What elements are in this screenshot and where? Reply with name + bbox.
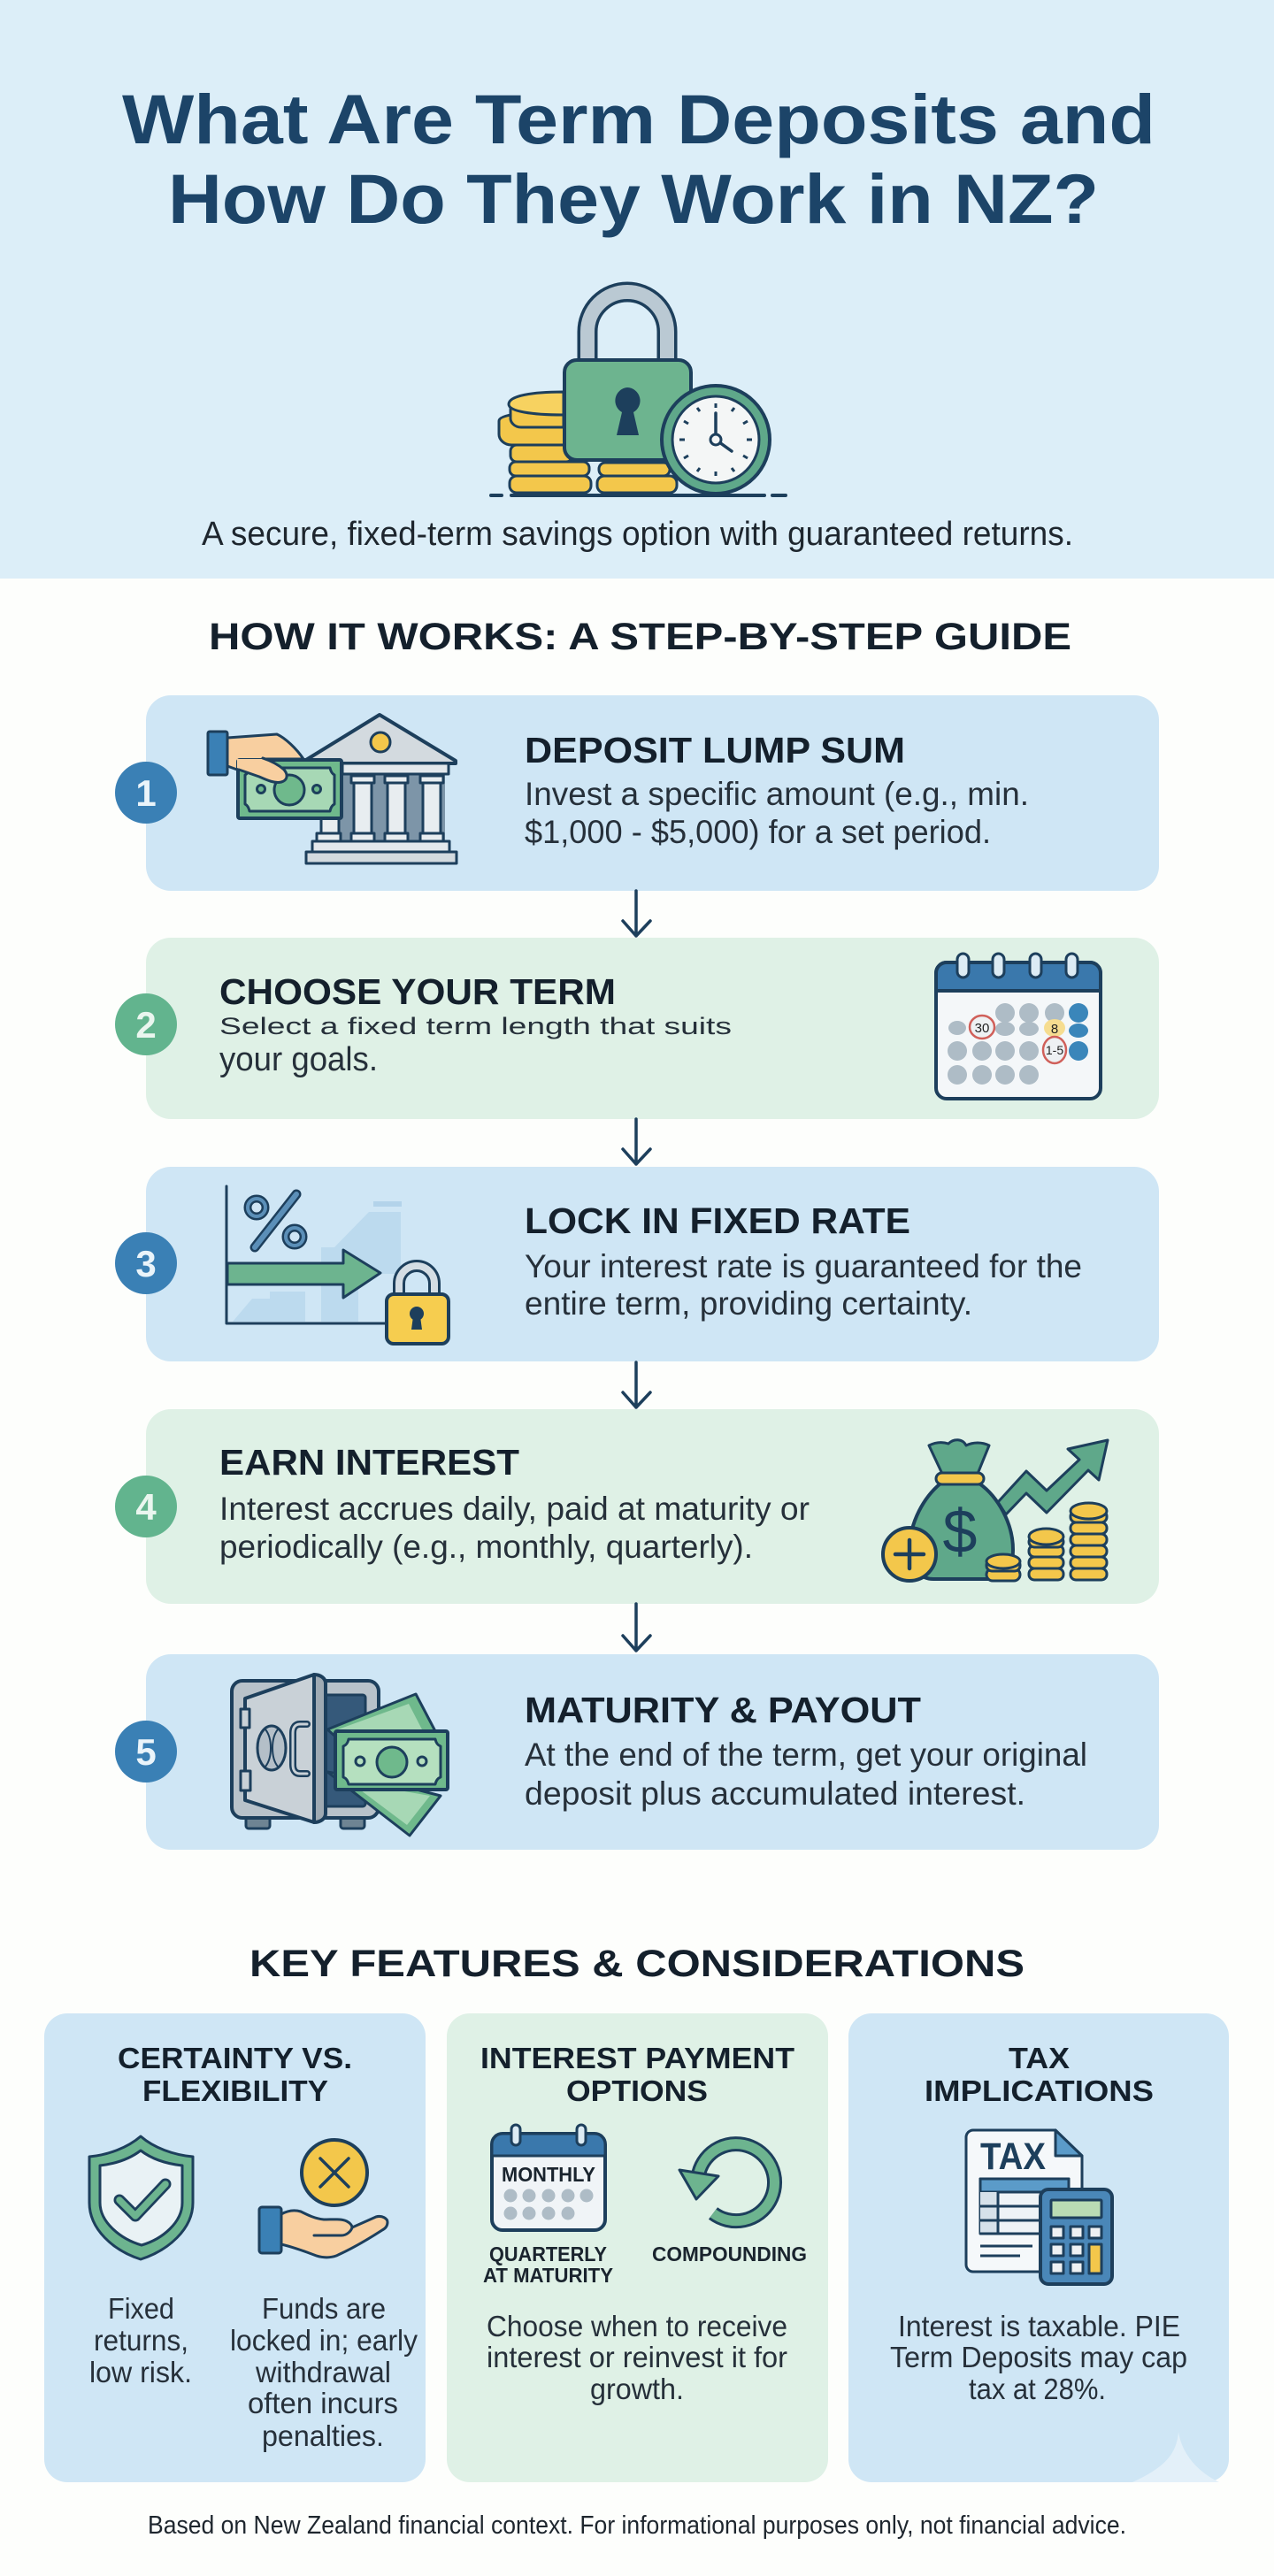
title: How Do They Work in NZ? (168, 159, 1099, 238)
icon: shield with check (89, 2136, 193, 2259)
panel heading: TAX (1009, 2042, 1070, 2074)
text: funds locked in: Funds are (262, 2292, 386, 2325)
step number 4: 4 (135, 1486, 157, 1528)
text: tax note: Interest is taxable. PIE (898, 2310, 1180, 2342)
panel heading: CERTAINTY VS. (118, 2042, 352, 2074)
header panel (0, 0, 1274, 579)
panel: interest payment options (447, 2013, 828, 2482)
panel: certainty vs flexibility (44, 2013, 426, 2482)
text: fixed returns: Fixed (108, 2292, 174, 2325)
icon: hand with penalty coin (259, 2140, 388, 2258)
text: choose when to receive: Choose when to receive (487, 2310, 787, 2342)
step description (525, 1248, 1082, 1322)
icon: monthly calendar (492, 2125, 605, 2230)
step description: entire term, providing certainty. (525, 1285, 972, 1322)
text: funds locked in: penalties. (262, 2419, 384, 2452)
icon: padlock, coins and clock (491, 292, 786, 495)
step description: Your interest rate is guaranteed for the (525, 1248, 1082, 1284)
step number 3 (115, 1232, 177, 1294)
step title: DEPOSIT LUMP SUM (525, 730, 905, 770)
icon: calendar (936, 954, 1101, 1099)
panel heading (118, 2042, 352, 2107)
step number 3: 3 (135, 1243, 157, 1284)
step description: Invest a specific amount (e.g., min. (525, 776, 1029, 812)
subtitle: A secure, fixed-term savings option with guaranteed returns. (202, 516, 1073, 553)
arrow (623, 1604, 650, 1651)
text: fixed returns (89, 2292, 192, 2388)
icon: calendar: 1-5 (1046, 1043, 1063, 1057)
panel heading: INTEREST PAYMENT (480, 2042, 794, 2074)
icon: tax form and calculator (966, 2130, 1112, 2284)
icon: monthly calendar: MONTHLY (502, 2163, 595, 2186)
text: funds locked in (230, 2292, 418, 2452)
text: funds locked in: withdrawal (255, 2356, 391, 2388)
label: quarterly, at maturity (483, 2242, 613, 2287)
step description: deposit plus accumulated interest. (525, 1775, 1025, 1812)
text: funds locked in: often incurs (248, 2387, 398, 2419)
panel: step 3 lock in fixed rate (115, 1167, 1159, 1361)
step number 4 (115, 1476, 177, 1537)
icon: money bag, growth arrow and coins (883, 1440, 1108, 1581)
icon: money bag, growth arrow and coins: $ (943, 1497, 977, 1566)
text: tax note (890, 2310, 1187, 2405)
label: quarterly, at maturity: QUARTERLY (489, 2242, 607, 2266)
step number 1: 1 (135, 772, 157, 814)
icon: compounding cycle arrow (679, 2144, 775, 2221)
panel: step 4 earn interest (115, 1409, 1159, 1604)
label: compounding: COMPOUNDING (652, 2242, 807, 2266)
step title: MATURITY & PAYOUT (525, 1690, 921, 1730)
panel: tax implications (848, 2013, 1229, 2482)
step description: Select a fixed term length that suits (219, 1013, 732, 1039)
step description: $1,000 - $5,000) for a set period. (525, 814, 991, 850)
step description (525, 776, 1029, 850)
footer disclaimer: Based on New Zealand financial context. For informational purposes only, not financial advice. (148, 2511, 1126, 2540)
step number 5: 5 (135, 1731, 157, 1773)
title: What Are Term Deposits and (122, 80, 1155, 158)
panel heading: IMPLICATIONS (925, 2074, 1154, 2107)
text: tax note: tax at 28%. (969, 2373, 1106, 2405)
text: choose when to receive (487, 2310, 787, 2405)
step title: EARN INTEREST (219, 1442, 519, 1483)
step description: Interest accrues daily, paid at maturity or (219, 1491, 810, 1527)
step title: CHOOSE YOUR TERM (219, 971, 616, 1012)
step description: your goals. (219, 1041, 378, 1078)
step description: periodically (e.g., monthly, quarterly). (219, 1529, 753, 1565)
icon: open safe with cash (232, 1675, 448, 1836)
step description (219, 1013, 732, 1078)
text: funds locked in: locked in; early (230, 2324, 418, 2357)
heading: how it works: HOW IT WORKS: A STEP-BY-STEP GUIDE (209, 616, 1071, 658)
icon: tax form and calculator: TAX (980, 2135, 1046, 2178)
arrow (623, 1362, 650, 1407)
label: quarterly, at maturity: AT MATURITY (483, 2264, 613, 2287)
title (122, 80, 1155, 238)
panel heading: FLEXIBILITY (142, 2074, 328, 2107)
icon: calendar: 8 (1051, 1022, 1058, 1037)
panel: step 1 deposit lump sum (115, 695, 1159, 891)
panel heading: OPTIONS (566, 2074, 708, 2107)
step number 1 (115, 762, 177, 824)
text: tax note: Term Deposits may cap (890, 2341, 1187, 2373)
arrow (623, 1119, 650, 1164)
step description (525, 1736, 1087, 1812)
icon: percent chart with padlock (226, 1186, 449, 1344)
step number 2 (115, 993, 177, 1055)
step description: At the end of the term, get your original (525, 1736, 1087, 1773)
step title: LOCK IN FIXED RATE (525, 1200, 910, 1241)
icon: hand depositing money at bank (208, 715, 457, 863)
step number 2: 2 (135, 1004, 157, 1046)
panel heading (480, 2042, 794, 2107)
text: choose when to receive: growth. (590, 2373, 684, 2405)
step number 5 (115, 1721, 177, 1782)
text: choose when to receive: interest or reinvest it for (487, 2341, 787, 2373)
step description (219, 1491, 810, 1565)
text: fixed returns: returns, (94, 2324, 188, 2357)
panel: step 5 maturity and payout (115, 1654, 1159, 1850)
heading: key features: KEY FEATURES & CONSIDERATIONS (249, 1943, 1025, 1985)
text: fixed returns: low risk. (89, 2356, 192, 2388)
panel: step 2 choose your term (115, 938, 1159, 1119)
panel heading (925, 2042, 1154, 2107)
icon: calendar: 30 (975, 1021, 989, 1036)
arrow (623, 891, 650, 936)
